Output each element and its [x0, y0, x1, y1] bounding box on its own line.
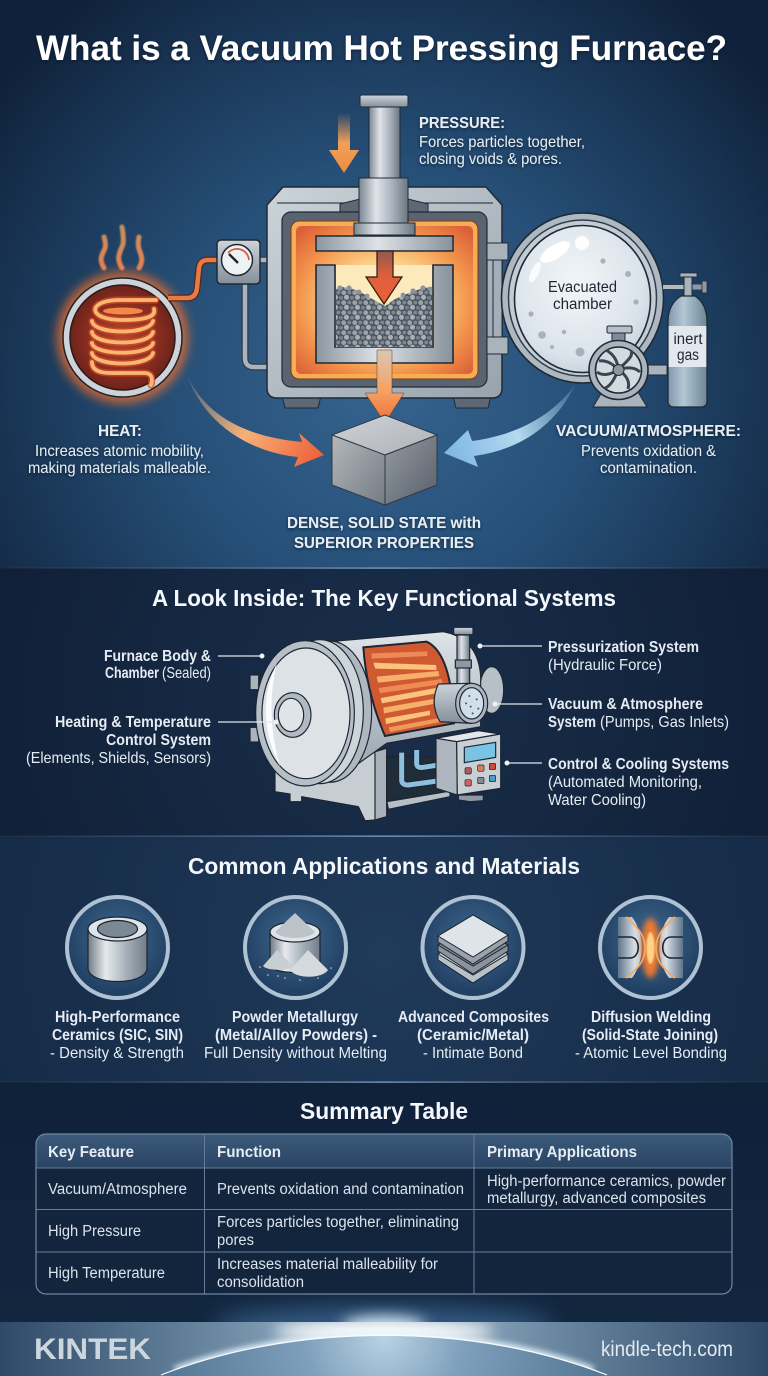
- icon: dense solid cube: [332, 415, 437, 505]
- icon: composite layers: [422, 897, 524, 998]
- table header: Primary Applications: [487, 1144, 637, 1161]
- text: vacuum: contamination.: [600, 460, 697, 477]
- label: pressurization system: [548, 639, 699, 674]
- table row: vacuum: Prevents oxidation and contamination: [217, 1181, 464, 1198]
- label: control and cooling systems: Control & Cooling Systems: [548, 756, 729, 773]
- door port: [274, 693, 311, 737]
- icon: ceramic ring: [67, 897, 168, 998]
- text: pressure: Forces particles together,: [419, 134, 585, 151]
- text: composites: [398, 1009, 549, 1062]
- horizon flare above footer: [342, 1316, 426, 1336]
- title: What is a Vacuum Hot Pressing Furnace?: [36, 29, 727, 68]
- pressurization column: [454, 627, 473, 685]
- press ram: [316, 95, 453, 251]
- heading: summary table: Summary Table: [300, 1098, 468, 1124]
- label: control and cooling systems: Water Cooling): [548, 792, 646, 809]
- text: result: DENSE, SOLID STATE with: [287, 515, 481, 532]
- machine shell: [330, 632, 481, 777]
- website: kindle-tech.com: [601, 1338, 733, 1361]
- text: heat: making materials malleable.: [28, 460, 211, 477]
- text: powder metallurgy: (Metal/Alloy Powders) -: [215, 1027, 377, 1044]
- icon: evacuated chamber: [502, 213, 664, 383]
- table row: temperature: consolidation: [217, 1274, 304, 1291]
- table row: pressure: Forces particles together, eliminating: [217, 1214, 459, 1231]
- machine stand: [275, 748, 387, 821]
- label: heating and temperature control: [26, 714, 211, 767]
- text: ceramics: Ceramics (SIC, SIN): [52, 1027, 183, 1044]
- panel: applications section background: [0, 836, 768, 1082]
- arrow: pressing output: [365, 350, 404, 423]
- gray pipe from gauge to body: [245, 260, 268, 367]
- table row: pressure: [48, 1214, 459, 1249]
- leader: pressurization: [478, 644, 542, 648]
- chamber label: chamber: [553, 296, 612, 313]
- label: pressurization system: (Hydraulic Force): [548, 657, 662, 674]
- label: heating and temperature control: (Elements, Shields, Sensors): [26, 750, 211, 767]
- label: furnace body and chamber: [104, 648, 211, 682]
- cooling pipes: [402, 750, 445, 785]
- powder charge: [336, 285, 432, 347]
- text: diffusion welding: - Atomic Level Bonding: [575, 1045, 727, 1062]
- leader: vacuum: [492, 702, 542, 706]
- heading: applications: Common Applications and Materials: [188, 853, 580, 879]
- icon: vacuum pump: [589, 326, 667, 407]
- label: vacuum and atmosphere system: (Pumps, Gas Inlets): [600, 714, 729, 731]
- orange pipe to gauge: [168, 260, 218, 298]
- text: composites: Advanced Composites: [398, 1009, 549, 1026]
- label: furnace body and chamber: Chamber: [105, 665, 159, 682]
- table row: pressure: pores: [217, 1232, 254, 1249]
- text: ceramics: - Density & Strength: [50, 1045, 184, 1062]
- text: diffusion welding: Diffusion Welding: [591, 1009, 711, 1026]
- summary table: [36, 1134, 732, 1294]
- label: vacuum and atmosphere system: Vacuum & Atmosphere: [548, 696, 703, 713]
- icon: heat source coil: [56, 227, 188, 404]
- text: result: [287, 515, 481, 552]
- arrow: vacuum contribution: [444, 385, 575, 467]
- arrow: ram force inside chamber: [366, 251, 402, 304]
- text: pressure: [419, 115, 585, 168]
- table row: vacuum: Vacuum/Atmosphere: [48, 1181, 187, 1198]
- leader: furnace body: [218, 654, 264, 658]
- table row: vacuum: [48, 1173, 726, 1207]
- panel: functional systems section background: [0, 568, 768, 836]
- text: pressure: PRESSURE:: [419, 115, 505, 132]
- text: powder metallurgy: Powder Metallurgy: [232, 1009, 358, 1026]
- text: composites: (Ceramic/Metal): [417, 1027, 529, 1044]
- tank label: [674, 331, 703, 364]
- text: ceramics: High-Performance: [55, 1009, 180, 1026]
- table row: vacuum: High-performance ceramics, powder: [487, 1173, 726, 1190]
- label: furnace body and chamber: (Sealed): [162, 665, 211, 682]
- machine door: [256, 641, 354, 786]
- tank label: inert: [674, 331, 703, 348]
- chamber label: Evacuated: [548, 279, 617, 296]
- table header: Function: [217, 1144, 281, 1161]
- text: heat: HEAT:: [98, 423, 142, 440]
- text: diffusion welding: [575, 1009, 727, 1062]
- label: control and cooling systems: [548, 756, 729, 809]
- table row: temperature: High Temperature: [48, 1265, 165, 1282]
- text: composites: - Intimate Bond: [423, 1045, 523, 1062]
- table header: Key Feature: [48, 1144, 134, 1161]
- icon: metal powder: [245, 897, 346, 998]
- table row: temperature: [48, 1256, 438, 1291]
- text: heat: [28, 423, 211, 477]
- label: vacuum and atmosphere system: [548, 696, 729, 731]
- text: vacuum: [556, 423, 741, 477]
- table row: vacuum: metallurgy, advanced composites: [487, 1190, 706, 1207]
- text: ceramics: [50, 1009, 184, 1062]
- control box: [436, 731, 501, 802]
- leader: heating: [218, 720, 278, 724]
- panel: how it works section background: [0, 0, 768, 568]
- icon: diffusion welding: [600, 897, 701, 998]
- label: vacuum and atmosphere system: System: [548, 714, 596, 731]
- panel: summary section background: [0, 1082, 768, 1322]
- text: vacuum: VACUUM/ATMOSPHERE:: [556, 423, 741, 440]
- logo: KINTEK: [34, 1333, 151, 1366]
- arrow: heat contribution: [187, 375, 324, 467]
- vacuum port: [434, 683, 488, 723]
- label: heating and temperature control: Heating & Temperature: [55, 714, 211, 731]
- text: pressure: closing voids & pores.: [419, 151, 562, 168]
- crucible: [316, 265, 453, 363]
- text: vacuum: Prevents oxidation &: [581, 443, 716, 460]
- text: powder metallurgy: [204, 1009, 387, 1062]
- coil turns: [92, 300, 156, 385]
- text: heat: Increases atomic mobility,: [35, 443, 204, 460]
- heading: functional systems: A Look Inside: The Key Functional Systems: [152, 585, 616, 611]
- hot zone: [291, 221, 478, 379]
- label: pressurization system: Pressurization System: [548, 639, 699, 656]
- label: furnace body and chamber: Furnace Body &: [104, 648, 211, 665]
- chamber label: [548, 279, 617, 313]
- text: result: SUPERIOR PROPERTIES: [294, 535, 474, 552]
- icon: pressure gauge: [217, 240, 260, 284]
- text: powder metallurgy: Full Density without Melting: [204, 1045, 387, 1062]
- label: control and cooling systems: (Automated Monitoring,: [548, 774, 702, 791]
- label: heating and temperature control: Control System: [106, 732, 211, 749]
- leader: control: [504, 760, 542, 766]
- table header: [48, 1144, 637, 1161]
- illustration: furnace machine: [250, 627, 504, 821]
- table row: pressure: High Pressure: [48, 1223, 141, 1240]
- furnace vessel: [267, 95, 502, 408]
- tank label: gas: [677, 347, 699, 364]
- hinges: [487, 243, 508, 354]
- glow above footer: [214, 1306, 554, 1346]
- table row: temperature: Increases material malleability for: [217, 1256, 438, 1273]
- footer band: [0, 1321, 768, 1376]
- arrow: pressure direction: [329, 113, 359, 173]
- icon: steam waves: [101, 227, 142, 268]
- window heating elements: [363, 642, 454, 736]
- text: diffusion welding: (Solid-State Joining): [582, 1027, 718, 1044]
- icon: inert gas cylinder: [663, 273, 707, 407]
